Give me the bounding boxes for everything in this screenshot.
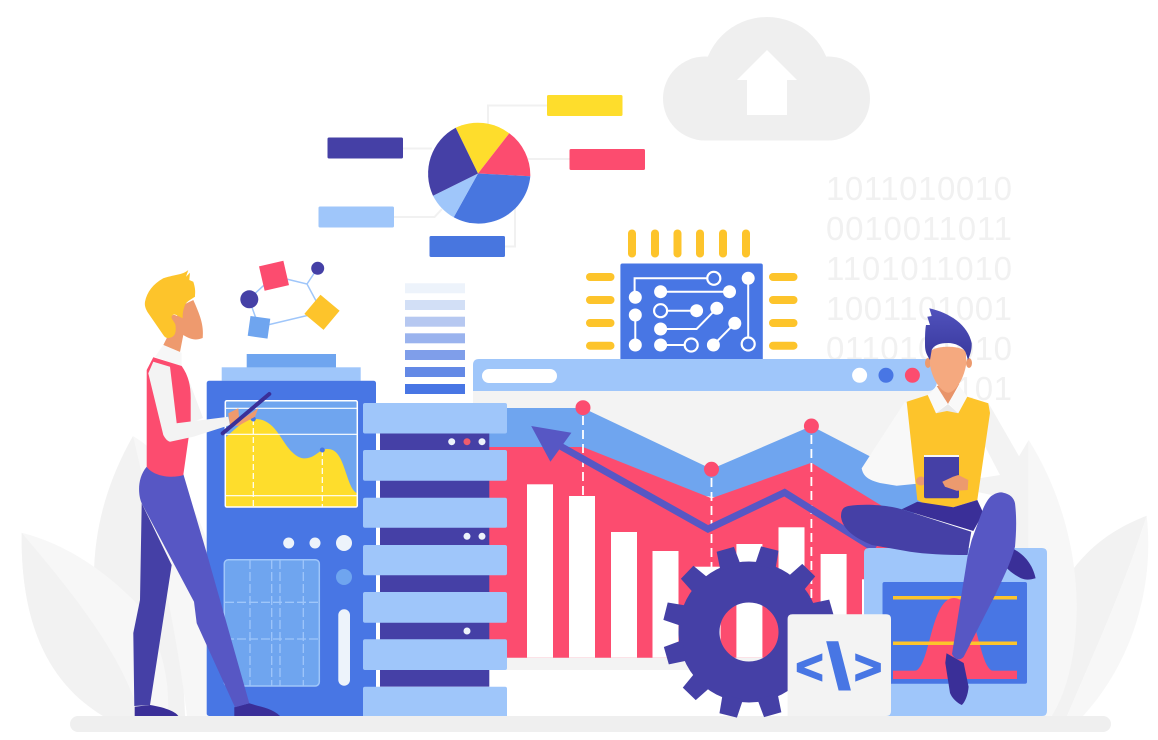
address pill: [482, 369, 557, 383]
stylus: [223, 394, 269, 433]
shirt torso: [968, 440, 1005, 512]
code card: <: [796, 642, 824, 694]
screen with yellow area chart: [225, 401, 357, 507]
grid panel: [224, 560, 319, 686]
shoes: [135, 703, 280, 716]
binary text: 1011010101: [826, 370, 1012, 407]
control dots: [283, 535, 352, 585]
network of shapes: [240, 261, 340, 339]
ground: [70, 716, 1111, 732]
man on the right: [841, 308, 1036, 705]
pie chart with labels: [318, 95, 645, 257]
collar: [155, 345, 182, 367]
white bars: [527, 484, 888, 658]
binary text: [826, 170, 1012, 407]
data point dots: [576, 400, 819, 477]
background leaves: [22, 436, 1148, 716]
thigh: [841, 505, 971, 555]
collar: [928, 386, 967, 416]
left hand: [916, 476, 926, 486]
hand: [228, 408, 258, 426]
icon: gear: [663, 546, 835, 718]
slider: [338, 609, 350, 686]
browser title bar: [473, 359, 937, 391]
shirt arms: [862, 402, 1026, 497]
hair: [145, 270, 195, 338]
hair: [925, 308, 972, 360]
code card: [788, 614, 891, 716]
binary text: 1101011010: [826, 250, 1012, 287]
code card: \: [826, 631, 851, 703]
tablet: [924, 455, 959, 498]
binary text: 1011010010: [826, 170, 1012, 207]
blue area band: [489, 408, 925, 520]
browser body: [473, 380, 933, 670]
server tower: [207, 354, 376, 716]
vest: [147, 357, 191, 477]
arrow: [531, 426, 875, 549]
window buttons: [852, 368, 920, 383]
rear shoe: [1006, 548, 1036, 580]
ears: [925, 358, 972, 368]
icon: cloud upload: [663, 17, 870, 145]
bell curve monitor box: [864, 548, 1047, 716]
head skin and neck: [163, 300, 203, 352]
back of shirt: [188, 378, 203, 424]
back leg: [133, 503, 172, 706]
server rack: [363, 403, 507, 716]
front leg: [952, 492, 1016, 659]
binary text: 1001101001: [826, 290, 1012, 327]
browser window with chart: [473, 359, 937, 670]
man on the left: [133, 270, 280, 716]
face: [930, 347, 966, 393]
arm: [148, 362, 230, 442]
vest: [907, 395, 990, 507]
neck: [937, 384, 959, 404]
lap: [902, 500, 983, 531]
lower shoe: [945, 653, 969, 705]
dashed drop lines: [583, 416, 811, 600]
code card: >: [854, 642, 882, 694]
binary text: 0110101010: [826, 330, 1012, 367]
front leg: [139, 467, 249, 707]
binary text: 0010011011: [826, 210, 1012, 247]
stacked gradient bars: [405, 283, 465, 394]
right hand: [942, 475, 968, 491]
icon: circuit chip: [586, 230, 798, 364]
red area: [489, 447, 905, 658]
